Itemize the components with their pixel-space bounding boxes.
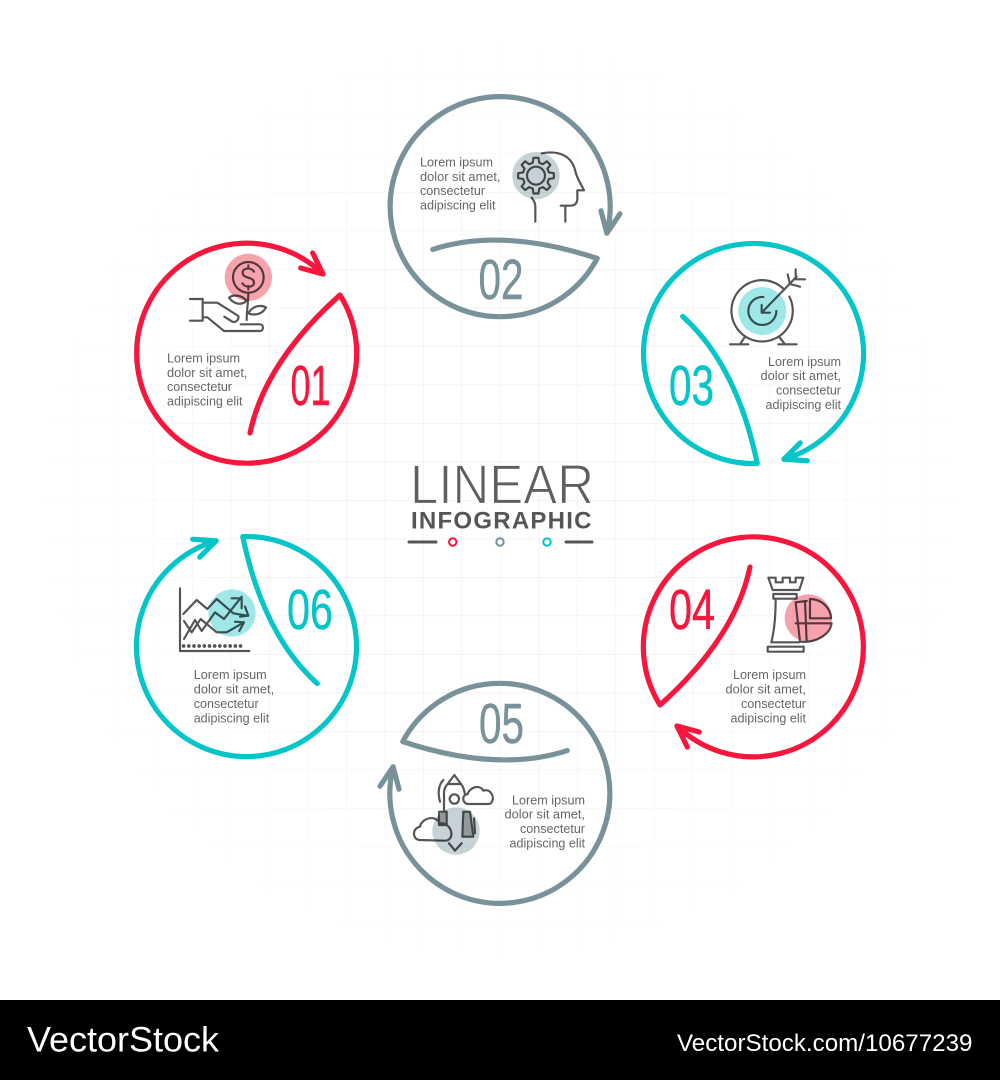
footer bar [0,1000,1000,1080]
text block 05 [504,792,586,850]
number 01: 01 [290,354,330,418]
ring arrow 03 [603,203,904,504]
panel 03: target step [603,203,904,504]
heading: LINEAR: LINEAR [410,452,594,515]
text block 04: adipiscing elit [730,710,806,726]
text block 06: adipiscing elit [194,710,270,726]
ring arrow 01 [137,243,357,463]
text block 02 [420,154,500,212]
ring arrow 02 [350,56,650,357]
text block 06: Lorem ipsum [194,667,267,682]
icon: rook and pie chart [768,578,832,652]
text block 03: dolor sit amet, [760,368,841,383]
text block 05: adipiscing elit [510,836,585,850]
text block 03: Lorem ipsum [768,354,841,369]
text block 02: consectetur [420,183,486,198]
panel 05: rocket step [350,643,650,944]
text block 06 [194,667,274,726]
panel 04: chess rook step [643,537,863,757]
number 05: 05 [479,692,524,756]
text block 05: consectetur [520,821,586,836]
text block 03 [760,354,842,412]
icon: line chart with arrows [180,588,256,651]
text block 02: dolor sit amet, [420,169,500,184]
text block 03: consectetur [776,382,842,398]
text block 01: adipiscing elit [167,394,243,408]
icon: head with gear [512,152,584,222]
text block 01 [167,350,248,408]
text block 04 [726,667,807,726]
footer brand: VectorStock [27,1020,220,1060]
footer url: VectorStock.com/10677239 [677,1030,972,1057]
text block 01: dolor sit amet, [167,365,248,380]
icon: rocket and clouds [414,775,493,855]
text block 05: dolor sit amet, [504,806,585,822]
text block 06: dolor sit amet, [194,682,274,696]
text block 04: dolor sit amet, [726,682,806,696]
center title [409,452,594,546]
text block 03: adipiscing elit [766,397,841,412]
title ornament [409,538,592,546]
icon: hand with coin plant [190,254,272,331]
text block 06: consectetur [194,696,259,711]
number 03: 03 [669,354,714,418]
panel 02: head with gear step [350,56,650,357]
text block 05: Lorem ipsum [512,792,585,808]
heading: INFOGRAPHIC: INFOGRAPHIC [411,507,592,534]
panel 06: chart step [96,496,397,797]
text block 02: adipiscing elit [420,198,496,212]
text block 01: consectetur [167,379,233,394]
number 06: 06 [287,578,333,642]
text block 04: consectetur [741,696,807,711]
ring arrow 06 [96,496,397,797]
text block 01: Lorem ipsum [167,350,240,366]
panel 01: money growth step [137,243,357,463]
number 04: 04 [669,578,715,642]
icon: target with arrow [730,269,805,344]
text block 04: Lorem ipsum [733,667,806,682]
number 02: 02 [478,248,524,312]
ring arrow 04 [643,537,863,757]
text block 02: Lorem ipsum [420,154,493,170]
ring arrow 05 [350,643,650,944]
